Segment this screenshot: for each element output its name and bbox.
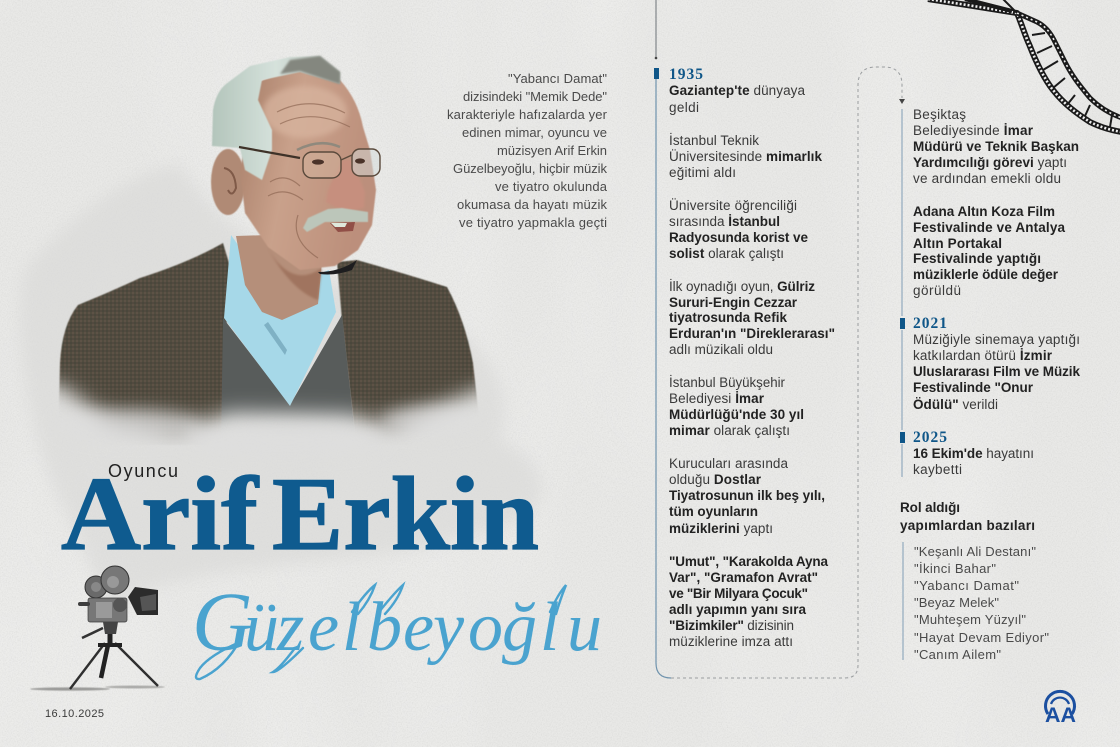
heading: roles xyxy=(900,500,1035,533)
timeline column 2: Festivalinde yaptığı xyxy=(913,251,1041,266)
collar shadow xyxy=(318,260,357,274)
roles list: "Canım Ailem" xyxy=(914,647,1001,662)
timeline column 1: İstanbul Büyükşehir xyxy=(669,375,785,390)
intro text: okumasa da hayatı müzik xyxy=(457,197,608,212)
timeline column 1: adlı müzikali oldu xyxy=(669,342,773,357)
jacket xyxy=(58,243,482,445)
roles list: "Keşanlı Ali Destanı" xyxy=(914,544,1036,559)
heading: roles: yapımlardan bazıları xyxy=(900,518,1035,533)
nose xyxy=(326,160,365,212)
intro text: karakteriyle hafızalarda yer xyxy=(447,107,608,122)
timeline column 2: Adana Altın Koza Film xyxy=(913,204,1055,219)
timeline column 2: 16 Ekim'de hayatını xyxy=(913,446,1034,461)
timeline column 1: müziklerine imza attı xyxy=(669,634,793,649)
timeline column 1: İlk oynadığı oyun, Gülriz xyxy=(669,279,815,294)
portrait xyxy=(55,56,482,456)
timeline column 1: Üniversitesinde mimarlık xyxy=(669,149,822,164)
eyebrow xyxy=(297,143,340,150)
timeline column 1: tüm oyunların xyxy=(669,504,758,519)
timeline column 2: katkılardan ötürü İzmir xyxy=(913,348,1053,363)
timeline column 1: ve "Bir Milyara Çocuk" xyxy=(669,586,808,601)
roles list: "Yabancı Damat" xyxy=(914,578,1019,593)
face xyxy=(240,71,376,270)
timeline column 2: 2021 xyxy=(913,315,947,332)
timeline column 1: sırasında İstanbul xyxy=(669,214,780,229)
timeline column 2: Belediyesinde İmar xyxy=(913,123,1034,138)
intro text: dizisindeki "Memik Dede" xyxy=(463,89,607,104)
timeline column 2: görüldü xyxy=(913,283,961,298)
timeline column 1: Müdürlüğü'nde 30 yıl xyxy=(669,407,804,422)
intro text: müzisyen Arif Erkin xyxy=(497,143,607,158)
forehead highlight xyxy=(263,86,347,138)
timeline column 2: müziklerle ödüle değer xyxy=(913,267,1059,282)
timeline column 1: müziklerini yaptı xyxy=(669,521,773,536)
title: Arif Erkin xyxy=(61,455,539,572)
timeline column 2: 2025 xyxy=(913,429,947,446)
hair shadow xyxy=(280,56,340,84)
timeline column 1: İstanbul Teknik xyxy=(669,133,759,148)
shirt xyxy=(224,235,336,406)
neck xyxy=(236,235,322,320)
mouth xyxy=(330,222,355,232)
timeline column 2: Müdürü ve Teknik Başkan xyxy=(913,139,1079,154)
title script: Güzelbeyoğlu: Güzelbeyoğlu xyxy=(192,576,602,669)
roles list xyxy=(903,542,1049,662)
title: Arif Erkin: Arif xyxy=(61,455,259,572)
timeline column 1: Radyosunda korist ve xyxy=(669,230,808,245)
timeline column 1: Sururi-Engin Cezzar xyxy=(669,295,798,310)
intro text: "Yabancı Damat" xyxy=(508,71,607,86)
timeline column 1: solist olarak çalıştı xyxy=(669,246,784,261)
timeline column 2: kaybetti xyxy=(913,462,962,477)
timeline column 1: Tiyatrosunun ilk beş yılı, xyxy=(669,488,825,503)
timeline column 1: olduğu Dostlar xyxy=(669,472,762,487)
ear xyxy=(211,149,245,215)
label: Oyuncu: Oyuncu xyxy=(108,461,178,481)
title: Arif Erkin: Erkin xyxy=(272,455,539,572)
intro text xyxy=(447,71,608,230)
timeline column 1: mimar olarak çalıştı xyxy=(669,423,790,438)
intro text: edinen mimar, oyuncu ve xyxy=(462,125,607,140)
body with fade xyxy=(58,235,482,445)
timeline column 2: Müziğiyle sinemaya yaptığı xyxy=(913,332,1080,347)
roles list: "Muhteşem Yüzyıl" xyxy=(914,612,1026,627)
timeline column 1: tiyatrosunda Refik xyxy=(669,310,787,325)
timeline column 1: adlı yapımın yanı sıra xyxy=(669,602,806,617)
timeline column 1: Erduran'ın "Direklerarası" xyxy=(669,326,835,341)
background: watercolor wash xyxy=(20,165,542,613)
timeline column 2: Yardımcılığı görevi yaptı xyxy=(913,155,1067,170)
neck shadow xyxy=(276,260,323,300)
timeline column 2: Altın Portakal xyxy=(913,236,1002,251)
timeline column 1: Gaziantep'te dünyaya xyxy=(669,83,805,98)
timeline column 2: Beşiktaş xyxy=(913,107,966,122)
timeline column 1: Belediyesi İmar xyxy=(669,391,765,406)
intro text: Güzelbeyoğlu, hiçbir müzik xyxy=(453,161,608,176)
roles list: "Beyaz Melek" xyxy=(914,595,999,610)
fog xyxy=(55,406,480,456)
logo: AA xyxy=(1045,691,1076,727)
timeline column 2: Festivalinde "Onur xyxy=(913,380,1034,395)
timeline column 2: Festivalinde ve Antalya xyxy=(913,220,1065,235)
timeline connector xyxy=(654,0,905,678)
timeline column 1: Üniversite öğrenciliği xyxy=(669,198,797,213)
sweater xyxy=(222,315,354,428)
intro text: ve tiyatro okulunda xyxy=(495,179,608,194)
hair xyxy=(212,56,340,180)
date: 16.10.2025 xyxy=(45,708,104,720)
timeline column 2: ve ardından emekli oldu xyxy=(913,171,1061,186)
timeline column 1: Kurucuları arasında xyxy=(669,456,788,471)
logo: AA: AA xyxy=(1045,704,1076,727)
script flourishes xyxy=(196,585,566,679)
timeline column 1 xyxy=(669,66,835,649)
intro text: ve tiyatro yapmakla geçti xyxy=(459,215,607,230)
shadows xyxy=(30,687,110,691)
eyes xyxy=(312,158,365,165)
timeline column 2: Uluslararası Film ve Müzik xyxy=(913,364,1080,379)
timeline column 1: geldi xyxy=(669,100,699,115)
timeline column 2 xyxy=(913,107,1080,477)
roles list: "İkinci Bahar" xyxy=(914,561,996,576)
timeline column 2: Ödülü" verildi xyxy=(913,397,998,412)
timeline column 1: "Umut", "Karakolda Ayna xyxy=(669,554,828,569)
timeline column 1: eğitimi aldı xyxy=(669,165,736,180)
icon: film strip xyxy=(928,0,1120,132)
glasses xyxy=(239,147,380,178)
shirt placket xyxy=(264,322,287,355)
roles list: "Hayat Devam Ediyor" xyxy=(914,630,1049,645)
timeline column 1: "Bizimkiler" dizisinin xyxy=(669,618,794,633)
timeline column 1: Var", "Gramafon Avrat" xyxy=(669,570,818,585)
heading: roles: Rol aldığı xyxy=(900,500,960,515)
timeline column 1: 1935 xyxy=(669,66,703,83)
wrinkles xyxy=(268,104,350,258)
icon: film camera xyxy=(30,566,165,691)
moustache xyxy=(303,208,368,232)
